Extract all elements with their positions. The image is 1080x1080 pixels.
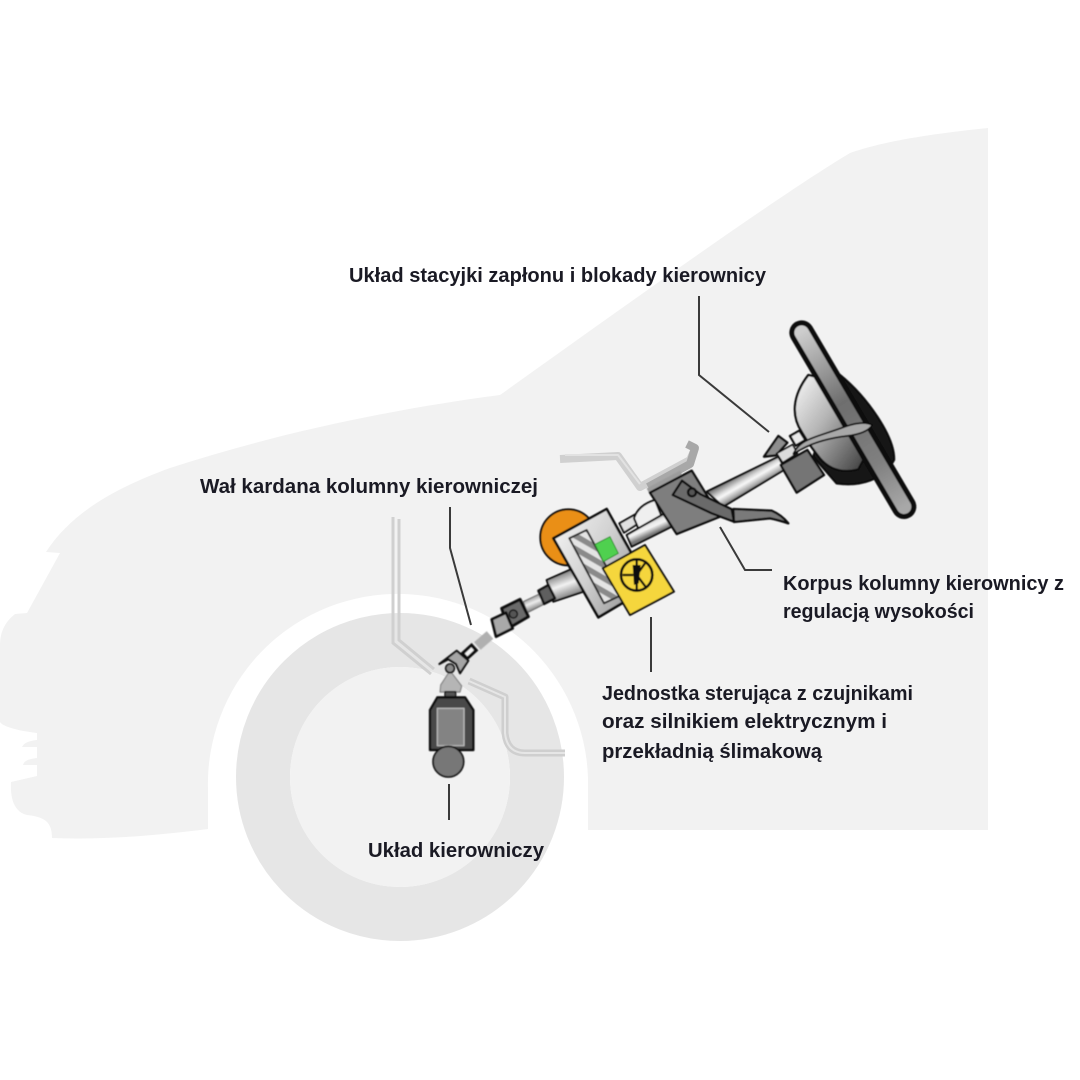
label: column housing: regulacją wysokości bbox=[783, 601, 974, 623]
height adjustment lever bbox=[673, 481, 734, 522]
small coupling bbox=[464, 647, 475, 657]
steering column assembly bbox=[430, 333, 904, 777]
control unit casing bbox=[553, 509, 650, 617]
steering wheel hub, rear black side bbox=[813, 375, 894, 484]
tube below control unit bbox=[547, 568, 583, 602]
gear input wedge bbox=[440, 671, 462, 692]
label: control unit bbox=[602, 683, 913, 763]
front wheel bbox=[263, 640, 537, 914]
lock sleeve bbox=[777, 445, 797, 463]
leader: ignition lock bbox=[699, 296, 769, 432]
car body silhouette bbox=[0, 128, 988, 838]
lever handle bbox=[733, 509, 788, 523]
thin shaft bbox=[477, 635, 490, 646]
lower assembly bbox=[430, 585, 555, 777]
label: control unit: oraz silnikiem elektrycznym i bbox=[602, 711, 887, 733]
neck bbox=[445, 692, 456, 697]
label: column housing: Korpus kolumny kierownicy z bbox=[783, 573, 1064, 595]
steering wheel rim bbox=[802, 333, 904, 507]
ignition lock prism bbox=[764, 436, 787, 457]
leader: universal joint shaft bbox=[450, 507, 471, 625]
dark coupling bbox=[538, 585, 555, 604]
lower tube and flare bbox=[619, 500, 672, 547]
hub collar bbox=[790, 431, 805, 446]
column bracket bbox=[650, 471, 720, 534]
label: universal joint shaft: Wał kardana kolumny kierowniczej bbox=[200, 476, 538, 498]
intermediate shaft bbox=[523, 593, 546, 613]
leader: control unit bbox=[650, 617, 652, 672]
upper assembly bbox=[540, 333, 904, 565]
label: control unit: Jednostka sterująca z czujnikami bbox=[602, 683, 913, 705]
lever pivot bbox=[688, 488, 696, 496]
worm gear strip bbox=[569, 530, 622, 603]
lower fork bbox=[439, 651, 468, 673]
label: column housing bbox=[783, 573, 1064, 623]
label: ignition and steering lock: Układ stacyjki zapłonu i blokady kierownicy bbox=[349, 265, 767, 287]
upper universal joint bbox=[492, 599, 528, 637]
pivot pin bbox=[446, 664, 454, 673]
main column tube bbox=[707, 457, 785, 507]
grey pipe: behind column bracket bbox=[560, 444, 695, 487]
control unit bbox=[553, 509, 674, 617]
leader: steering gear bbox=[448, 784, 450, 820]
label: control unit: przekładnią ślimakową bbox=[602, 741, 823, 763]
leader: column housing bbox=[720, 527, 772, 570]
yellow electronics module bbox=[603, 545, 674, 615]
green sensor bbox=[595, 537, 618, 562]
steering gear ball bbox=[433, 746, 464, 777]
ignition block bbox=[781, 450, 824, 493]
steering gear housing bbox=[430, 697, 473, 750]
label: steering gear: Układ kierowniczy bbox=[368, 840, 545, 862]
grey pipe: left of steering shaft bbox=[393, 517, 434, 674]
grey pipe: right of steering shaft bbox=[469, 681, 565, 753]
steering wheel hub, silver cone bbox=[795, 375, 863, 471]
stalk bbox=[793, 423, 872, 454]
icon: orange motor disc bbox=[540, 509, 596, 565]
bracket top rail bbox=[647, 471, 684, 497]
